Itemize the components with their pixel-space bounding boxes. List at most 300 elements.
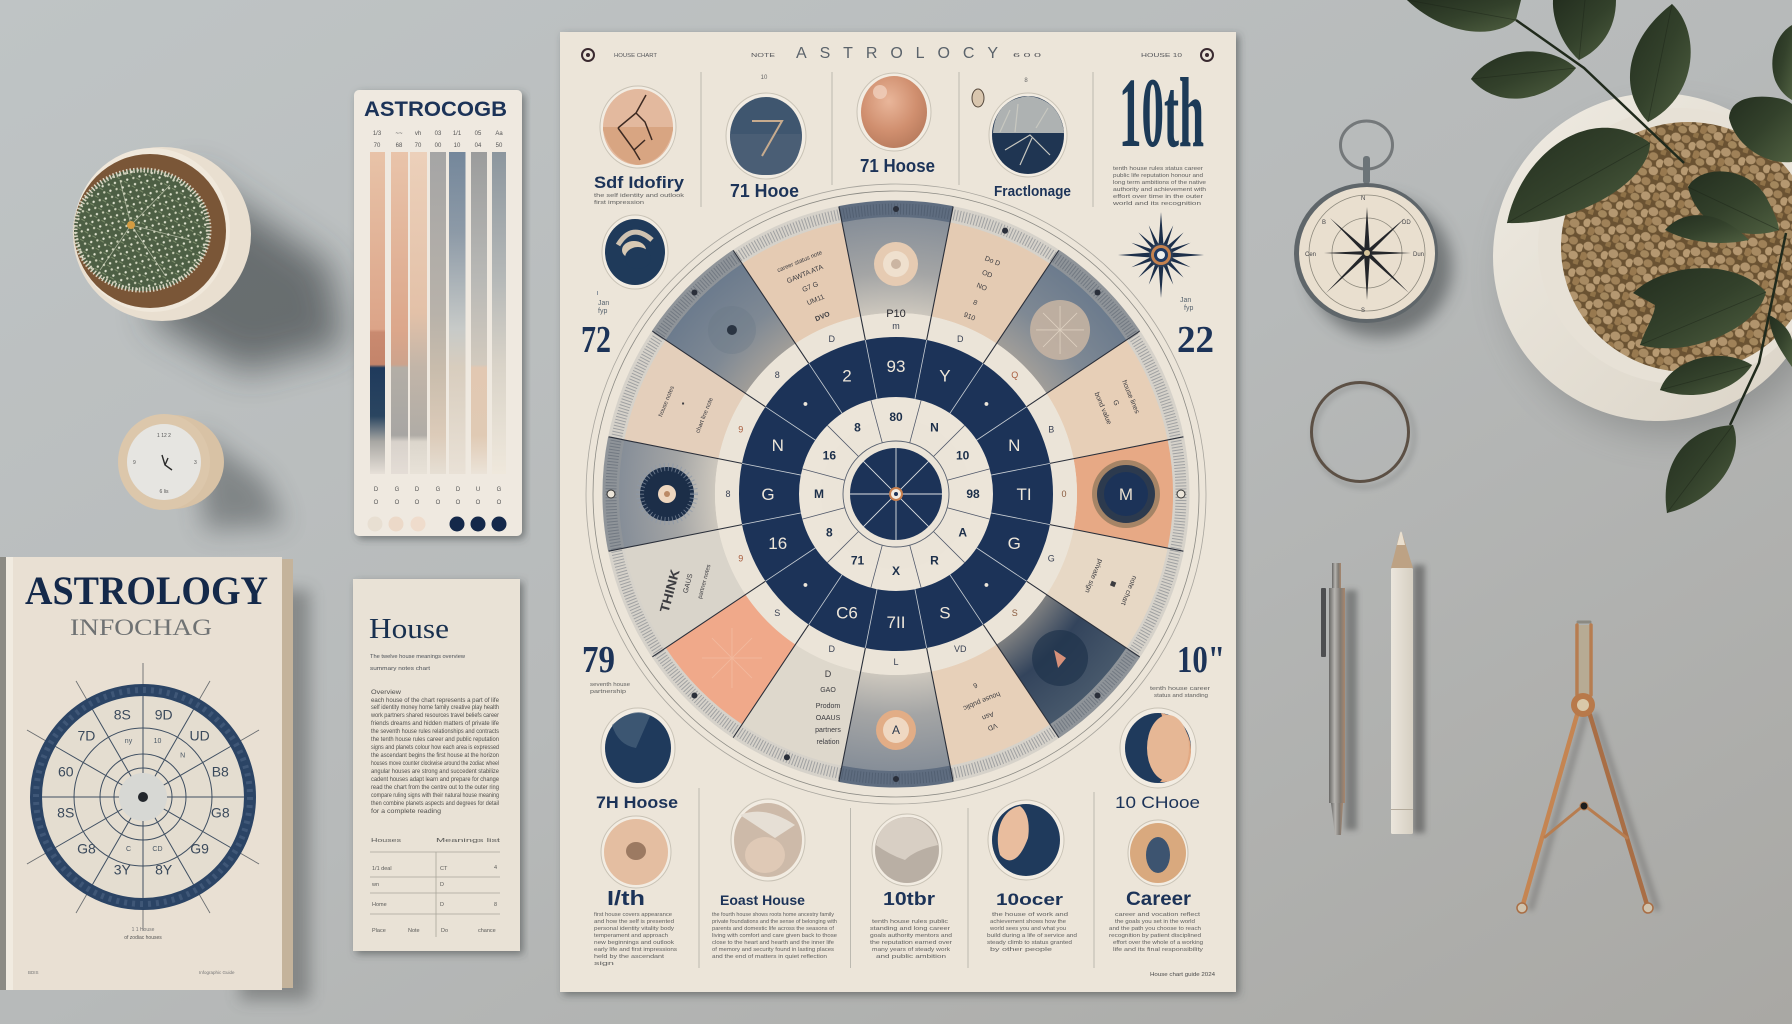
glyph ring marks: S [774, 608, 780, 618]
panel: bottom circle four: by other people [990, 947, 1052, 953]
color swatch strip card: 50 [496, 143, 503, 149]
panel: bottom circle four: steady climb to status granted [987, 940, 1072, 946]
astrology book: BDIS [28, 970, 39, 975]
glyph ring marks: 0 [1061, 489, 1067, 499]
panel: bottom circle one: held by the ascendant [594, 954, 665, 960]
navy sign ring [769, 367, 1023, 621]
zodiac wheel chart: Prodom [816, 703, 840, 710]
navy ring signs: 93 [887, 357, 905, 376]
card paragraph: houses move counter clockwise around the zodiac wheel [371, 761, 499, 767]
book zodiac wheel: 7D [77, 727, 95, 743]
card table: 8 [494, 902, 497, 908]
glyph ring marks: B [1048, 425, 1054, 435]
color swatch strip card: O [415, 500, 420, 506]
panel: bottom circle one: temperament and approach [594, 933, 668, 939]
cream ring numbers: X [892, 564, 900, 578]
pocket compass: Dun [1413, 252, 1424, 258]
panel: fracture circle: 8 [1024, 78, 1028, 84]
big 10th numeral: authority and achievement with [1113, 187, 1206, 193]
card table: D [440, 882, 444, 888]
card table: chance [478, 928, 496, 934]
color swatch strip card: Aa [495, 131, 503, 137]
book zodiac wheel: UD [189, 727, 210, 743]
panel: 7th house lower [596, 708, 678, 812]
color swatch strip card: 03 [435, 131, 442, 137]
color swatch strip card: O [395, 500, 400, 506]
big 10th numeral [1113, 57, 1206, 207]
color swatch strip card: 68 [396, 143, 403, 149]
numeral 22: fyp [1184, 305, 1193, 312]
navy ring signs: TI [1016, 485, 1032, 504]
sector medallion: south [876, 710, 916, 750]
card paragraph: the ascendant begins the first house at the horizon [371, 753, 499, 759]
cream ring numbers: M [814, 487, 824, 501]
panel: terracotta planet [857, 73, 935, 176]
panel: career: recognition by patient disciplined [1109, 933, 1201, 939]
card paragraph: for a complete reading [371, 809, 441, 815]
leaf midribs [1407, 0, 1779, 513]
cream ring numbers: 8 [826, 526, 833, 540]
panel: bottom circle three: goals authority mentors and [870, 933, 952, 939]
color swatch strip card: 1/3 [373, 131, 382, 137]
sector text blocks: 6 [972, 681, 978, 689]
book zodiac wheel: ny [125, 738, 133, 745]
color swatch strip card: O [374, 500, 379, 506]
panel: bottom circle one: sign [594, 961, 614, 967]
panel: career: career and vocation reflect [1115, 912, 1201, 918]
poster footer note: House chart guide 2024 [1150, 972, 1215, 978]
sector text blocks: GAWTA ATA [786, 264, 825, 285]
card table [370, 838, 501, 937]
panel: bottom circle one: personal identity vitality body [594, 926, 675, 932]
navy ring signs: 16 [768, 534, 787, 553]
card table: wn [371, 882, 379, 888]
color swatch strip card [354, 90, 522, 536]
metal ring [1312, 382, 1414, 487]
card table: 1/1 deal [372, 866, 392, 872]
panel: career: effort over the whole of a working [1113, 940, 1203, 946]
numeral 79 [582, 639, 630, 695]
numeral 72: I [597, 291, 598, 297]
glyph ring marks: D [957, 334, 964, 344]
sector text blocks: G [1111, 399, 1120, 407]
card paragraph: self identity money home family creative play health [371, 705, 499, 711]
book zodiac wheel: 10 [154, 738, 161, 745]
panel: career [1109, 820, 1204, 953]
navy ring signs: ● [803, 398, 808, 408]
sector medallion: east: M [1119, 485, 1133, 504]
panel: bottom circle three: many years of steady work [872, 947, 951, 953]
numeral 79: 79 [582, 639, 615, 681]
card table: Meanings list [436, 838, 501, 844]
numeral 72: fyp [598, 308, 607, 315]
navy ring signs: 7II [887, 613, 905, 632]
small clock: 1 12 2 [157, 433, 171, 439]
book zodiac wheel: C [126, 846, 131, 853]
glyph ring marks: S [1012, 608, 1018, 618]
sector medallion: top: P10 [886, 308, 906, 320]
panel: bottom circle four: build during a life of service and [987, 933, 1077, 939]
navy ring signs: G [761, 485, 775, 504]
book zodiac wheel: 8S [114, 707, 131, 723]
glyph ring marks: D [828, 334, 835, 344]
poster header [582, 45, 1213, 62]
card table: CT [440, 866, 448, 872]
panel: self identity [594, 86, 685, 206]
sector text blocks: VD [986, 721, 998, 731]
sector text blocks: Do D [984, 255, 1001, 268]
color swatch strip card: O [497, 500, 502, 506]
big 10th numeral: public life reputation honour and [1113, 173, 1203, 179]
compass ring [1340, 121, 1392, 169]
label: Fractlonage [994, 183, 1071, 200]
panel: self identity: first impression [594, 200, 644, 206]
sector text blocks: G7 G [801, 281, 820, 294]
sector medallion: upper right [1030, 300, 1090, 360]
panel: bottom circle two [712, 799, 837, 960]
book subtitle: INFOCHAG [70, 615, 212, 640]
astrology book [0, 557, 310, 1000]
panel dividers [699, 72, 1094, 968]
sector text blocks: DVO [814, 311, 832, 323]
glyph ring marks: m [892, 321, 900, 331]
poster header: HOUSE CHART [614, 53, 658, 59]
color swatch strip card: G [497, 487, 502, 493]
big 10th numeral: world and its recognition [1113, 201, 1201, 207]
sector text blocks [777, 250, 1140, 731]
color swatch strip card: 10 [454, 143, 461, 149]
numeral 10th: tenth house career [1150, 686, 1210, 692]
card table: Houses [371, 838, 401, 844]
card paragraph: read the chart from the centre out to the outer ring [371, 785, 499, 791]
zodiac wheel chart: GAUS [683, 573, 695, 594]
pocket compass: S [1361, 308, 1365, 314]
small clock: 6 lis [160, 489, 169, 495]
cactus pot [73, 147, 345, 372]
panel: 7th house: 10 [761, 75, 768, 81]
panel: bottom circle two: private foundations and the sense of belonging with [712, 919, 837, 925]
book zodiac wheel: CD [152, 846, 163, 853]
label: 71 Hoose [860, 156, 935, 176]
panel: bottom circle two: close to the heart and hearth and the inner life [712, 940, 834, 946]
outer guide rings [586, 184, 1206, 804]
panel: 7th house [726, 75, 806, 201]
panel: fracture circle [972, 78, 1071, 200]
poster header: NOTE [751, 53, 776, 59]
color swatch strip card: 05 [475, 131, 482, 137]
glyph ring marks: 9 [738, 425, 743, 435]
cream ring numbers: 8 [854, 420, 861, 434]
sector text blocks: bond value [1093, 391, 1112, 426]
cream ring numbers: A [958, 526, 967, 540]
card table: D [440, 902, 444, 908]
numeral 22 [1177, 297, 1214, 361]
panel: bottom circle two: of memory and security found in lasting places [712, 947, 835, 953]
card table: Place [372, 928, 386, 934]
panel: bottom circle one: and how the self is presented [594, 919, 674, 925]
sector medallion: top [874, 242, 918, 320]
main astrology poster [501, 32, 1291, 992]
panel: bottom circle two: parents and domestic life across the seasons of [712, 926, 835, 932]
astrology book: 1 1 House [132, 927, 155, 933]
glyph ring marks: 8 [725, 489, 731, 499]
book title: ASTROLOGY [25, 568, 268, 613]
sector medallion: east [1092, 460, 1160, 528]
panel: bottom circle three: and public ambition [876, 954, 946, 960]
sector text blocks: ■ [1106, 579, 1119, 589]
book zodiac wheel: G9 [190, 841, 209, 857]
sector text blocks: UM11 [806, 294, 826, 307]
book zodiac wheel: 60 [58, 763, 74, 779]
leaves [1407, 0, 1792, 513]
numeral 79: seventh house [590, 682, 630, 688]
zodiac wheel chart [501, 99, 1291, 889]
panel: bottom circle four [987, 800, 1077, 953]
color swatch strip card: 04 [475, 143, 482, 149]
glyph ring marks: L [893, 657, 899, 667]
glyph ring marks: 8 [775, 370, 780, 380]
small clock: 3 [194, 460, 197, 466]
cream ring numbers: R [930, 554, 939, 568]
navy ring signs: S [939, 603, 951, 622]
label: Eoast House [720, 892, 805, 908]
panel: career: and the path you choose to reach [1109, 926, 1201, 932]
color swatch strip card: G [395, 487, 400, 493]
color swatch strip card: D [374, 487, 379, 493]
card paragraph: compare ruling signs with their natural house meaning [371, 793, 499, 799]
numeral 10th: 10" [1177, 639, 1225, 681]
mechanical pen [1321, 563, 1357, 835]
astrology book: of zodiac houses [124, 935, 162, 941]
navy ring signs: ● [984, 398, 989, 408]
sector text blocks: career status note [777, 250, 824, 274]
big 10th numeral: long term ambitions of the native [1113, 180, 1206, 186]
pocket compass: B [1322, 220, 1326, 226]
book zodiac wheel: N [180, 752, 185, 759]
brass dividers [1517, 622, 1657, 913]
sector text blocks: OD [981, 269, 993, 280]
zodiac wheel chart: relation [817, 739, 840, 746]
navy ring signs: G [1008, 534, 1021, 553]
zodiac wheel chart: THINK [657, 567, 683, 614]
navy ring signs: Y [939, 367, 951, 386]
sector text blocks: 910 [963, 312, 976, 323]
panel: bottom circle four: the house of work and [992, 912, 1068, 918]
cream ring numbers: 10 [956, 448, 970, 462]
pocket compass [1294, 121, 1452, 337]
panel: bottom circle three: tenth house rules public [872, 919, 949, 925]
sector text blocks: private sign [1083, 558, 1103, 594]
sector text blocks: 8 [972, 299, 978, 307]
color swatch strip card: 00 [435, 143, 442, 149]
card paragraph: then combine planets aspects and degrees for detail [371, 801, 499, 807]
navy ring signs: ● [803, 580, 808, 590]
numeral 22: 22 [1177, 319, 1214, 361]
house boundary lines [609, 207, 1183, 781]
small clock [118, 414, 285, 530]
card paragraph: signs and planets colour how each area is expressed [371, 745, 499, 751]
label: 71 Hooe [730, 181, 799, 201]
zodiac wheel chart: ▪ [682, 399, 685, 408]
navy ring signs: N [772, 436, 784, 455]
cream glyph ring [727, 325, 1065, 663]
numeral 72: Jan [598, 300, 609, 307]
numeral 72 [581, 291, 611, 361]
book zodiac wheel: 3Y [114, 861, 132, 877]
panel: bottom circle one: first house covers appearance [594, 912, 672, 918]
label: 10ocer [996, 890, 1063, 909]
book zodiac wheel: 9D [155, 707, 173, 723]
metal scale band [501, 99, 1291, 889]
navy ring signs: N [1008, 436, 1020, 455]
sector medallion: south: A [892, 723, 900, 737]
book zodiac wheel: 8Y [155, 861, 173, 877]
card paragraph: work partners shared resources travel beliefs career [370, 713, 499, 719]
book zodiac wheel: G8 [77, 841, 96, 857]
navy ring signs: 2 [842, 367, 852, 386]
pocket compass: DD [1402, 220, 1411, 226]
panel: bottom circle two: and the end of matters in quiet reflection [712, 954, 827, 960]
card table: Home [372, 902, 387, 908]
sector medallion: upper left [708, 306, 756, 354]
numeral 10th: status and standing [1154, 693, 1208, 699]
navy ring signs: C6 [836, 603, 858, 622]
panel: bottom circle one [594, 816, 678, 967]
zodiac wheel chart: D [825, 669, 832, 679]
glyph ring marks [725, 321, 1067, 667]
astrology book: Infographic Guide [199, 970, 235, 975]
book zodiac wheel: 8S [57, 805, 74, 821]
hub [843, 441, 949, 547]
color swatch strip card: vh [415, 131, 421, 137]
panel: bottom circle one: early life and first impressions [594, 947, 678, 953]
small clock: 9 [133, 460, 136, 466]
glyph ring marks: VD [954, 644, 967, 654]
glyph ring marks: D [828, 644, 835, 654]
panel: career: life and its final responsibility [1113, 947, 1204, 953]
panel: bottom circle two: the fourth house shows roots home ancestry family [712, 912, 835, 918]
big 10th numeral: tenth house rules status career [1113, 166, 1203, 172]
zodiac wheel chart: house notes [658, 385, 676, 418]
card paragraph: friends dreams and hidden matters of private life [371, 721, 500, 727]
color swatch strip card: G [436, 487, 441, 493]
pocket compass: N [1361, 196, 1365, 202]
cream ring numbers: 71 [851, 554, 864, 568]
book zodiac wheel [27, 663, 259, 931]
cream ring numbers: 80 [889, 410, 903, 424]
navy ring signs [761, 357, 1032, 632]
card table: Do [441, 928, 448, 934]
glyph ring marks: 9 [738, 553, 743, 563]
cream ring numbers: 98 [966, 487, 980, 501]
zodiac wheel chart: chart line note [695, 396, 715, 434]
card paragraph: angular houses are strong and succedent stabilize [371, 769, 500, 775]
card paragraph: the tenth house rules career and public reputation [371, 737, 499, 743]
label: I/th [607, 888, 645, 910]
color swatch strip card: U [476, 487, 480, 493]
card table: 4 [494, 865, 497, 871]
color swatch strip card: 1/1 [453, 131, 462, 137]
poster header: 6 0 0 [1013, 53, 1041, 59]
sector medallion: lower right [1032, 630, 1088, 686]
numeral 79: partnership [590, 689, 626, 695]
panel: bottom circle three: the reputation earned over [870, 940, 952, 946]
sector text blocks: NO [975, 282, 988, 293]
card paragraph: the seventh house rules relationships and contracts [371, 729, 499, 735]
color swatch strip card: D [415, 487, 420, 493]
house note card [353, 579, 520, 951]
big 10th numeral: effort over time in the outer [1113, 194, 1203, 200]
cream ring numbers: N [930, 420, 939, 434]
pencil [1391, 532, 1425, 834]
sector text blocks: house public [962, 690, 1001, 711]
book zodiac wheel: G8 [211, 805, 230, 821]
poster header: HOUSE 10 [1141, 53, 1182, 59]
panel: bottom circle three [870, 814, 952, 960]
panel: bottom circle three: standing and long career [870, 926, 950, 932]
numeral 72: 72 [581, 319, 611, 361]
color swatch strip card: 70 [415, 143, 422, 149]
band markers [607, 206, 1185, 782]
sector texture: orange lower left [702, 628, 762, 688]
strip title: ASTROCOGB [364, 98, 507, 121]
cream ring numbers: 16 [823, 448, 836, 462]
panel: bottom circle four: world sees you and what you [990, 926, 1066, 932]
house sectors [578, 176, 1214, 812]
color swatch strip card: O [436, 500, 441, 506]
glyph ring marks: Q [1011, 370, 1018, 380]
poster title: ASTROLOCY [796, 45, 998, 62]
panel: bottom circle four: achievement shows how the [990, 919, 1066, 925]
zodiac wheel chart: partner notes [698, 564, 713, 600]
cream ring numbers [814, 410, 980, 578]
card paragraph: each house of the chart represents a part of life [371, 698, 500, 704]
label: Career [1126, 889, 1192, 910]
icon: swirl circle [602, 215, 668, 289]
glyph ring marks: G [1048, 553, 1055, 563]
sector text blocks: note chart [1119, 575, 1138, 606]
navy ring signs: ● [984, 580, 989, 590]
color swatch strip card: 70 [374, 143, 381, 149]
panel: bottom circle one: new beginnings and outlook [594, 940, 675, 946]
stems [1516, 20, 1786, 425]
pocket compass: Cen [1305, 252, 1316, 258]
plant pot [1493, 93, 1792, 421]
card heading: House [369, 613, 449, 645]
numeral 10th [1150, 639, 1225, 699]
cream number ring [821, 419, 971, 569]
house note card: The twelve house meanings overview [370, 654, 465, 660]
panel: 10th house lower [1115, 708, 1200, 812]
card paragraph: Overview [371, 690, 402, 696]
card paragraph: cadent houses adapt learn and prepare for change [371, 777, 500, 783]
color swatch strip card: O [456, 500, 461, 506]
label: 10 CHooe [1115, 793, 1200, 812]
color swatch strip card: O [476, 500, 481, 506]
card table: Note [408, 928, 420, 934]
zodiac wheel chart: GAO [820, 687, 836, 694]
color swatch strip card: D [456, 487, 461, 493]
sector text blocks: Asn [981, 710, 995, 721]
numeral 22: Jan [1180, 297, 1191, 304]
card paragraph [370, 690, 500, 815]
zodiac wheel chart: OAAUS [816, 715, 841, 722]
icon: starburst [1118, 212, 1204, 298]
panel: self identity: the self identity and outlook [594, 193, 685, 199]
sector text blocks: house lines [1120, 379, 1140, 415]
color swatch strip card: ~~ [395, 131, 403, 137]
panel: career: the goals you set in the world [1115, 919, 1195, 925]
